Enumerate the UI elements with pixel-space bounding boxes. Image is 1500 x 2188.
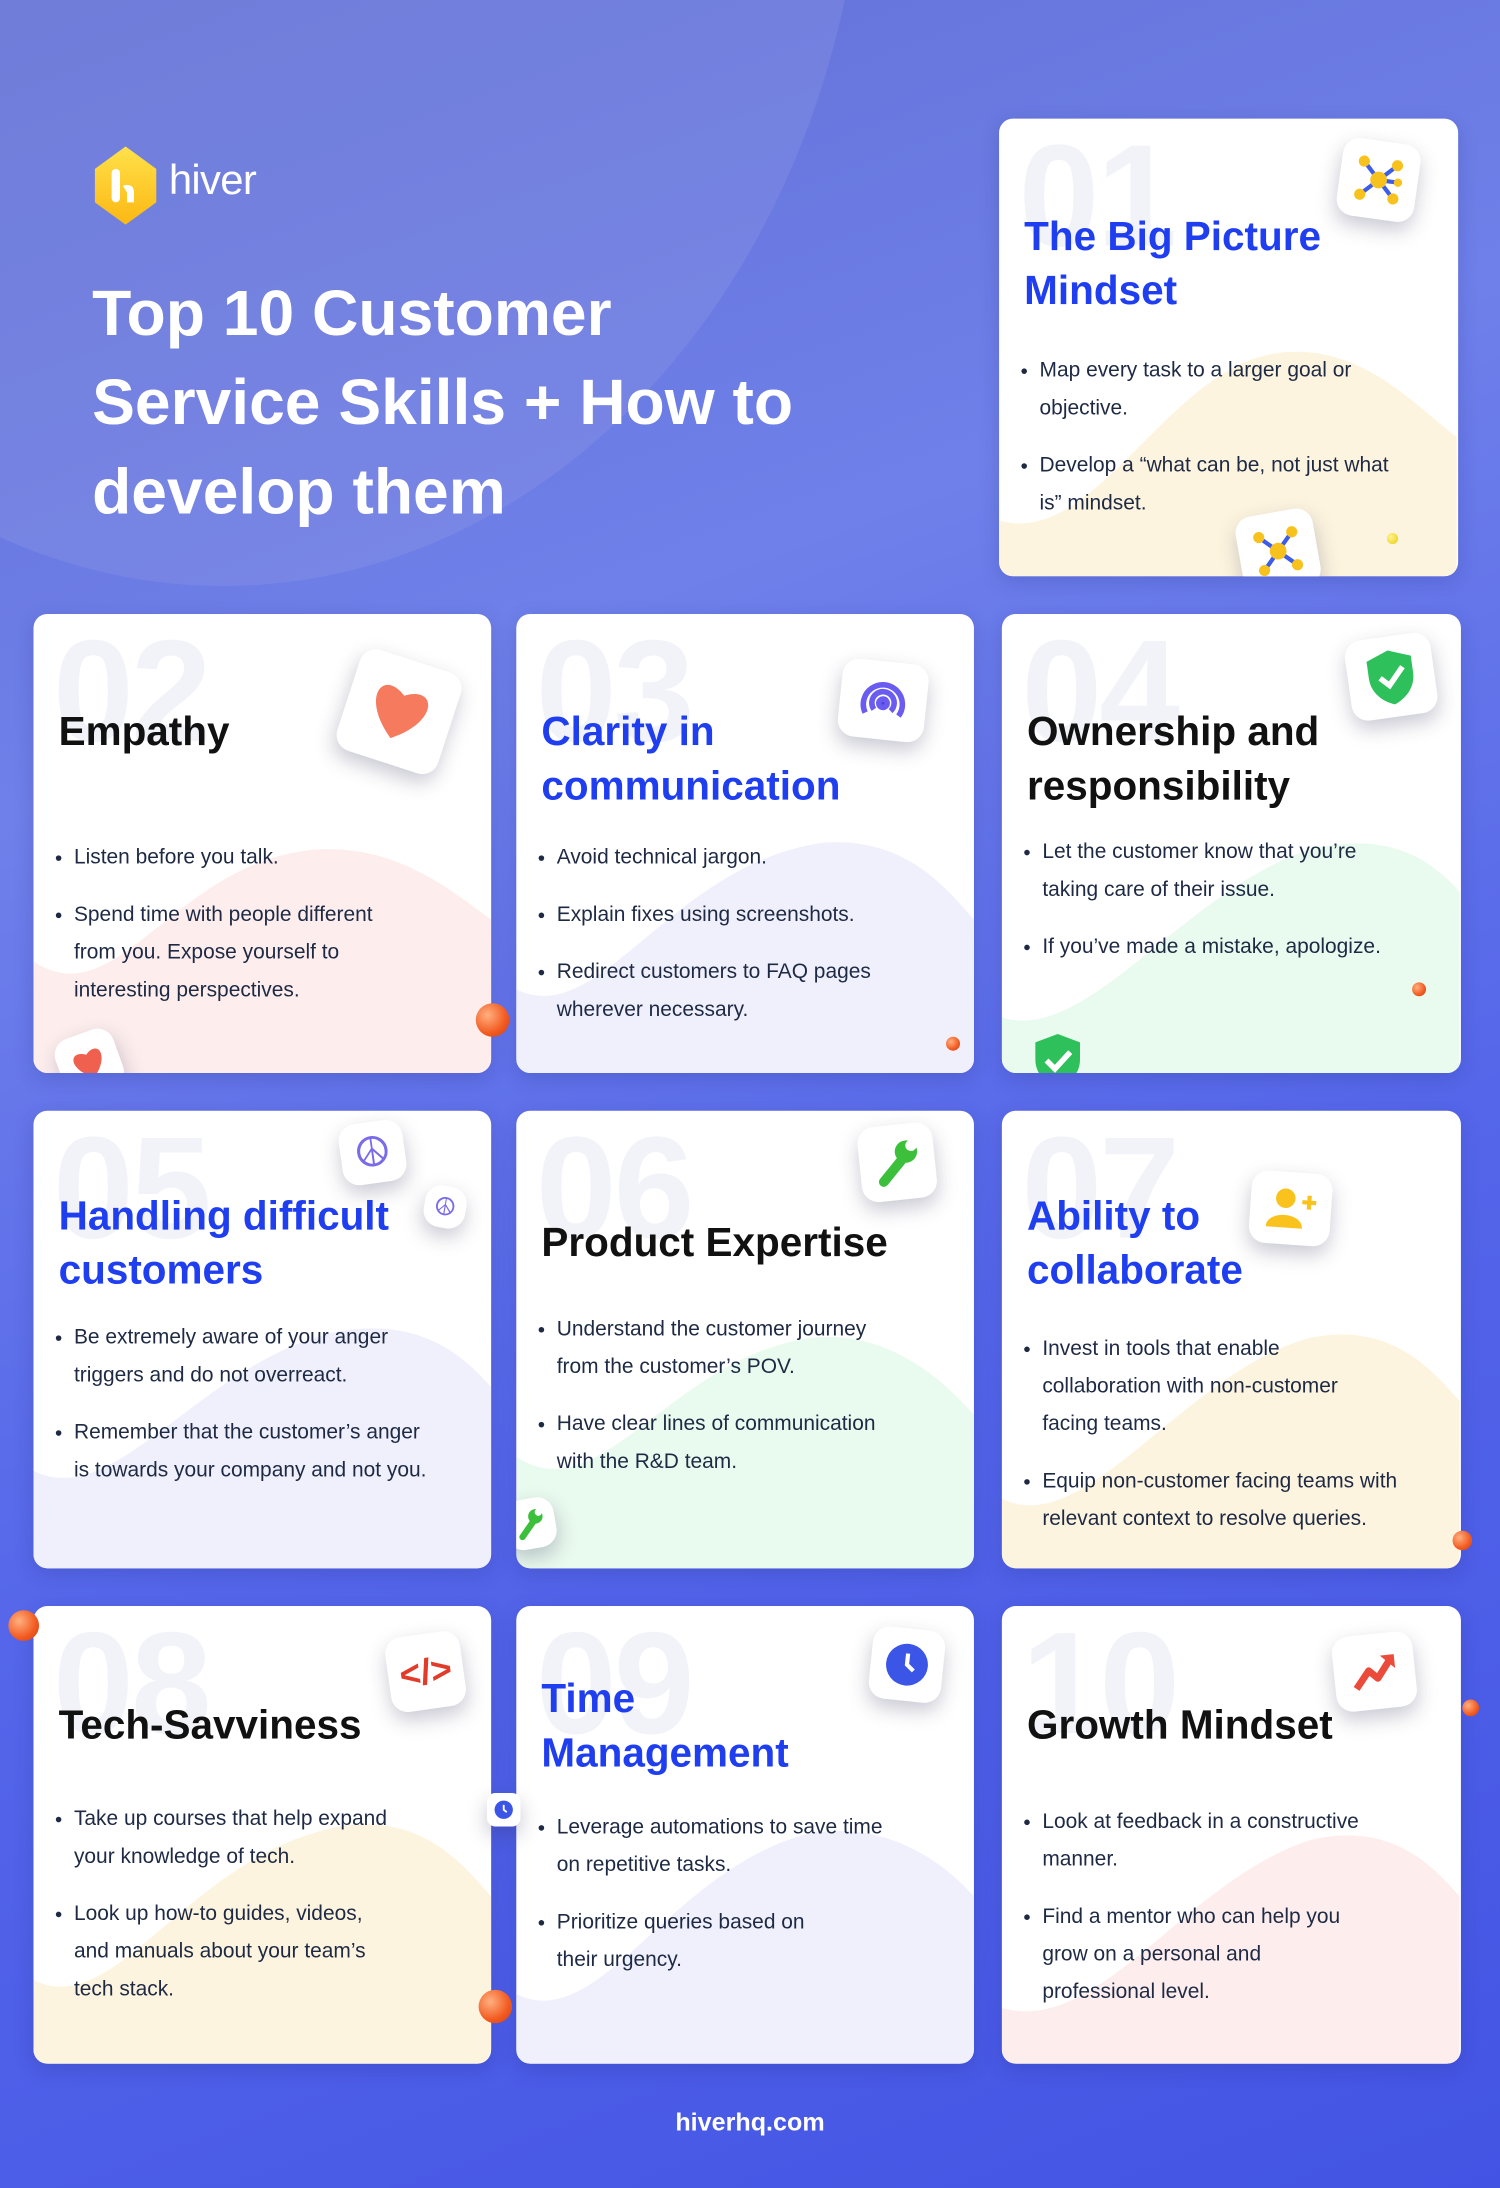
bullets: If you’ve made a mistake, apologize.	[1042, 935, 1381, 959]
bullets: Be extremely aware of your anger	[74, 1326, 388, 1349]
bullets	[538, 1317, 875, 1473]
bullets	[56, 1807, 387, 2001]
heading	[541, 1677, 789, 1776]
bullets: Leverage automations to save time	[557, 1815, 883, 1839]
bullets: with the R&D team.	[557, 1450, 737, 1473]
bullets	[56, 1326, 426, 1482]
bullets: from you. Expose yourself to	[74, 940, 339, 964]
card 03	[516, 614, 974, 1073]
heading	[1024, 215, 1321, 314]
heading: Ability to	[1027, 1194, 1200, 1239]
bullets: Prioritize queries based on	[557, 1910, 805, 1934]
bullets: grow on a personal and	[1042, 1942, 1261, 1966]
bullets: Let the customer know that you’re	[1042, 840, 1356, 864]
bullets: Spend time with people different	[74, 903, 373, 927]
bullets: Develop a “what can be, not just what	[1040, 453, 1389, 477]
card 01: 01	[1019, 119, 1174, 278]
icon: network	[1334, 136, 1423, 224]
title: Service Skills + How to	[92, 366, 793, 438]
title	[92, 276, 793, 527]
card 07: 07	[1021, 1111, 1177, 1270]
bullets: is towards your company and not you.	[74, 1458, 426, 1482]
card 01	[999, 119, 1458, 576]
bullets: Equip non-customer facing teams with	[1042, 1469, 1397, 1493]
icon: trend arrow	[1330, 1630, 1419, 1713]
bullets	[56, 846, 373, 1002]
small clock tile	[487, 1793, 520, 1827]
bullets	[1024, 840, 1381, 959]
icon: heart	[332, 645, 466, 778]
bullets: tech stack.	[74, 1977, 174, 2001]
heading	[1027, 1194, 1243, 1293]
bullets: Understand the customer journey	[557, 1317, 866, 1341]
title: Top 10 Customer	[92, 276, 612, 349]
heading: Clarity in	[541, 710, 715, 755]
footer: hiverhq.com	[675, 2108, 825, 2136]
card 03: 03	[536, 614, 692, 773]
card 06: 06	[536, 1111, 692, 1270]
bullets: Avoid technical jargon.	[557, 846, 767, 869]
heading: communication	[541, 765, 840, 809]
bullets: Map every task to a larger goal or	[1040, 359, 1351, 382]
heading: Ownership and	[1027, 710, 1319, 755]
bullets: their urgency.	[557, 1948, 682, 1972]
heading: Time	[541, 1677, 635, 1722]
bullets: Take up courses that help expand	[74, 1807, 387, 1831]
icon: signal	[836, 657, 930, 744]
bullets: wherever necessary.	[557, 998, 748, 1021]
bullets: collaboration with non-customer	[1042, 1374, 1338, 1398]
bullets: from the customer’s POV.	[557, 1355, 795, 1379]
bullets	[1021, 359, 1389, 515]
logo	[94, 146, 256, 224]
bullets: Find a mentor who can help you	[1042, 1905, 1340, 1928]
bullets: manner.	[1042, 1847, 1118, 1871]
bullets: and manuals about your team’s	[74, 1940, 366, 1963]
card 06	[516, 1111, 974, 1568]
bullets: on repetitive tasks.	[557, 1853, 731, 1877]
heading: Product Expertise	[541, 1221, 888, 1266]
card 08: 08	[53, 1606, 209, 1765]
bullets	[1024, 1337, 1397, 1531]
icon: peace: ☮	[351, 1127, 394, 1178]
heading: Tech-Savviness	[59, 1704, 362, 1748]
bullets: Look at feedback in a constructive	[1042, 1810, 1359, 1833]
icon: code	[383, 1629, 468, 1714]
heading: customers	[59, 1249, 263, 1293]
card 10	[1002, 1606, 1461, 2064]
heading: Mindset	[1024, 269, 1177, 314]
bullets: Have clear lines of communication	[557, 1412, 875, 1436]
icon: person add	[1248, 1169, 1334, 1247]
heading: collaborate	[1027, 1249, 1243, 1293]
bullets: Listen before you talk.	[74, 846, 279, 869]
bullets: facing teams.	[1042, 1412, 1167, 1436]
icon: peace	[337, 1118, 409, 1187]
heading	[59, 1194, 389, 1293]
heading	[1027, 710, 1319, 809]
icon: clock	[867, 1625, 947, 1705]
card 05	[33, 1111, 491, 1568]
heading: Growth Mindset	[1027, 1704, 1333, 1748]
card 04	[1002, 614, 1461, 1073]
heading: Handling difficult	[59, 1194, 389, 1239]
heading: The Big Picture	[1024, 215, 1321, 260]
card 04: 04	[1021, 614, 1177, 773]
title: develop them	[92, 455, 506, 527]
heading: Management	[541, 1732, 789, 1776]
bullets: triggers and do not overreact.	[74, 1363, 347, 1387]
bullets: Look up how-to guides, videos,	[74, 1902, 363, 1926]
logo: hiver	[169, 158, 256, 204]
icon: code: </>	[397, 1647, 454, 1695]
bullets: interesting perspectives.	[74, 978, 300, 1002]
heading: Empathy	[59, 710, 230, 755]
card 02	[33, 614, 491, 1073]
bullets: Remember that the customer’s anger	[74, 1420, 420, 1444]
bullets: relevant context to resolve queries.	[1042, 1507, 1367, 1531]
card 10: 10	[1021, 1606, 1177, 1765]
card 02: 02	[53, 614, 209, 773]
icon: wrench	[856, 1121, 939, 1204]
bullets: Invest in tools that enable	[1042, 1337, 1280, 1360]
bullets: your knowledge of tech.	[74, 1845, 295, 1868]
card 05: 05	[53, 1111, 209, 1270]
bullets: objective.	[1040, 396, 1128, 420]
card 09: 09	[536, 1606, 692, 1765]
card 07	[1002, 1111, 1461, 1568]
bullets: Redirect customers to FAQ pages	[557, 960, 871, 984]
bullets: is” mindset.	[1040, 491, 1147, 515]
bullets	[538, 1815, 883, 1972]
card 09	[516, 1606, 974, 2064]
heading: responsibility	[1027, 765, 1290, 809]
icon: shield	[1343, 631, 1440, 723]
bullets	[538, 846, 871, 1021]
bullets: taking care of their issue.	[1042, 878, 1275, 901]
heading	[541, 710, 840, 809]
card 08	[33, 1606, 491, 2064]
decorative balls	[476, 1003, 509, 1037]
bullets: professional level.	[1042, 1980, 1210, 2004]
bullets	[1024, 1810, 1359, 2004]
card 05: ☮	[432, 1191, 459, 1222]
bullets: Explain fixes using screenshots.	[557, 903, 855, 927]
